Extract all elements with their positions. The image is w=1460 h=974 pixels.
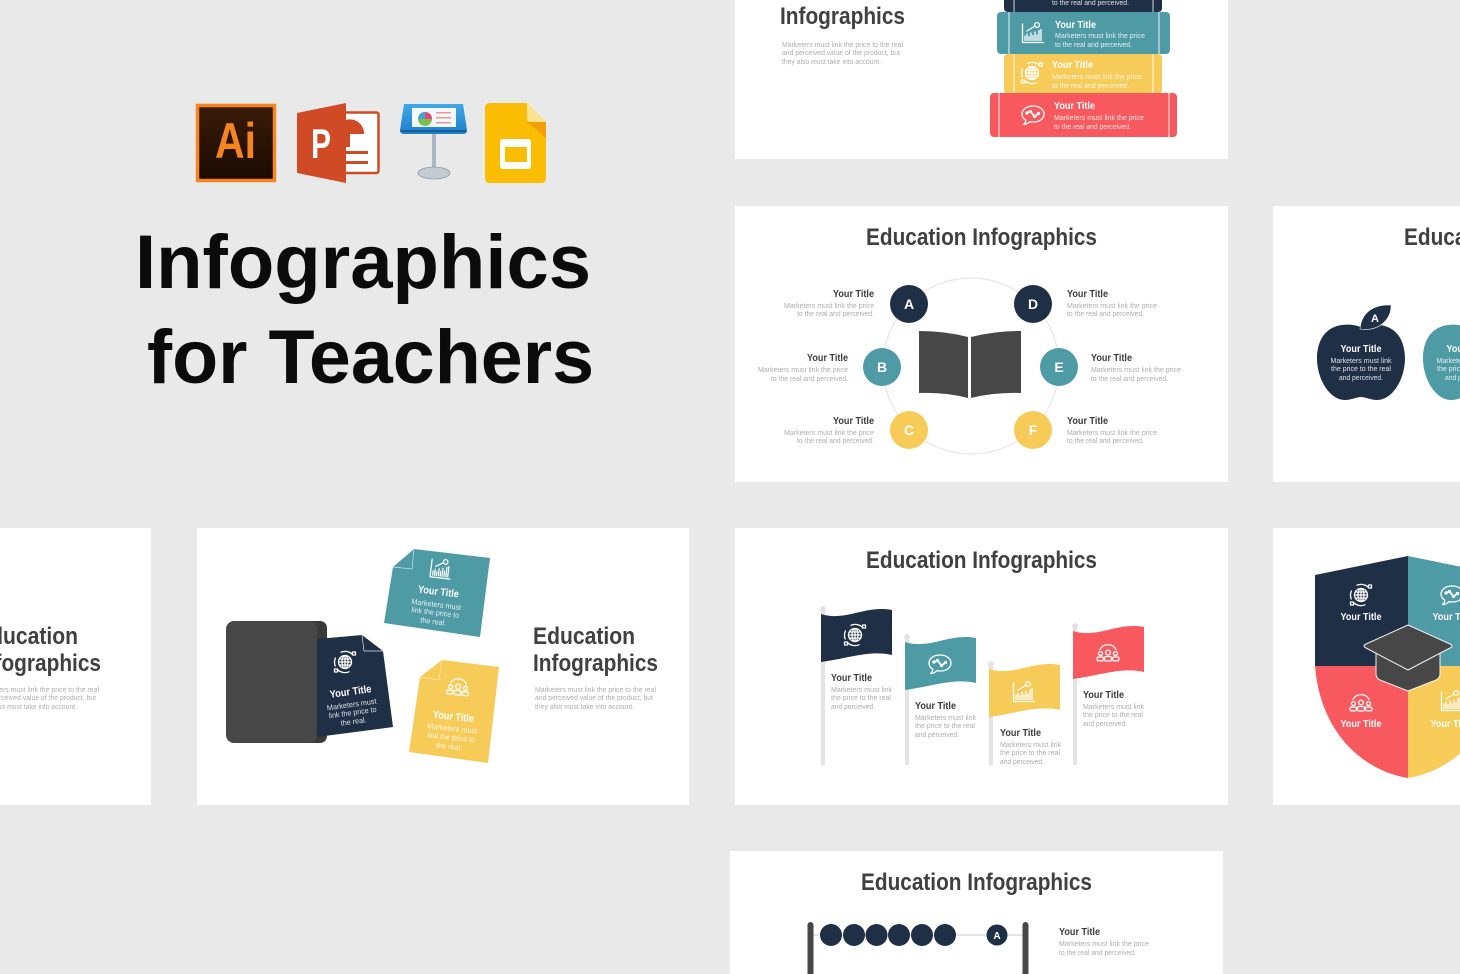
text block (1059, 926, 1149, 957)
item B (758, 348, 901, 386)
note: teal: the real. (420, 615, 447, 628)
shield quadrant: yellow (1408, 666, 1460, 778)
flag 3: and perceived. (1000, 757, 1044, 766)
main title: for Teachers (147, 315, 594, 400)
book: red: Marketers must link the price (1054, 113, 1144, 122)
text block (535, 685, 656, 711)
flag 1: Marketers must link (831, 685, 892, 694)
panel: shield slide (1273, 528, 1460, 805)
book: yellow: Your Title (1052, 59, 1093, 71)
flag 4: Marketers must link (1083, 702, 1144, 711)
item B: to the real and perceived. (771, 374, 848, 383)
item A: Your Title (833, 288, 874, 300)
main title (135, 220, 594, 400)
icon: Google Slides (485, 103, 546, 183)
flag 1 (820, 606, 892, 765)
note: yellow (409, 660, 499, 763)
note: navy: Marketers must (326, 696, 378, 712)
text block: to the real and perceived. (1059, 948, 1136, 957)
item E: to the real and perceived. (1091, 374, 1168, 383)
book: navy (1004, 0, 1162, 12)
note: yellow: link the price to (427, 731, 476, 744)
note: yellow: Your Title (432, 709, 474, 725)
abacus: A (993, 931, 1001, 942)
note: navy: Your Title (329, 683, 372, 701)
apple: navy: Marketers must link (1330, 356, 1392, 365)
text block: Marketers must link the price (1059, 939, 1149, 948)
icon: graduation cap (1364, 625, 1452, 691)
item D: to the real and perceived. (1067, 309, 1144, 318)
item B: B (877, 359, 887, 375)
flag 2 (904, 634, 976, 765)
panel: cropped left slide (0, 528, 151, 805)
heading: Education (533, 623, 635, 650)
book: teal: Your Title (1055, 19, 1096, 31)
heading: Education Infographics (866, 224, 1097, 251)
item C: to the real and perceived. (797, 436, 874, 445)
item C (784, 411, 928, 449)
flag 1: the price to the real (831, 693, 891, 702)
flag 3 (988, 661, 1061, 766)
item D: Marketers must link the price (1067, 301, 1157, 310)
flag 3: Your Title (1000, 727, 1041, 739)
flag 2: the price to the real (915, 721, 975, 730)
text block: Your Title (1059, 926, 1100, 938)
text block: Marketers must link the price to the real (782, 40, 903, 49)
item E: Marketers must link the price (1091, 365, 1181, 374)
item F: Marketers must link the price (1067, 428, 1157, 437)
apple: navy: the price to the real (1331, 364, 1391, 373)
heading: Infographics (780, 3, 905, 30)
note: teal: Your Title (417, 584, 460, 600)
book: yellow (1004, 54, 1162, 94)
item E: E (1054, 359, 1064, 375)
flag 1: and perceived. (831, 702, 875, 711)
heading: Infographics (533, 650, 658, 677)
item C: C (904, 422, 914, 438)
item E: Your Title (1091, 352, 1132, 364)
item F (1014, 411, 1157, 449)
note: navy: link the price to (328, 705, 377, 720)
shield quadrant: red: Your Title (1340, 718, 1382, 730)
main title: Infographics (135, 220, 591, 305)
note: yellow: the real. (436, 741, 463, 752)
tablet (226, 621, 327, 743)
panel: book circle slide (735, 206, 1228, 482)
shield quadrant: navy (1315, 556, 1408, 666)
apple: navy: and perceived. (1339, 373, 1383, 382)
text block: they also must take into account. (782, 57, 881, 66)
icon: open book (919, 331, 1021, 398)
icon: Keynote (400, 104, 467, 179)
heading (533, 623, 658, 677)
shield quadrant: teal (1408, 556, 1460, 666)
apple: teal (1423, 325, 1460, 400)
item F: to the real and perceived. (1067, 436, 1144, 445)
note: teal: Marketers must (411, 597, 463, 612)
note: teal: link the price to (411, 605, 460, 620)
item F: Your Title (1067, 415, 1108, 427)
shield quadrant: navy: Your Title (1340, 611, 1382, 623)
note: teal (384, 549, 490, 637)
shield quadrant: red (1315, 666, 1408, 778)
book: yellow: to the real and perceived. (1052, 81, 1129, 90)
item A: Marketers must link the price (784, 301, 874, 310)
text block: Marketers must link the price to the real (535, 685, 656, 694)
text block: and perceived value of the product, but (535, 693, 654, 702)
flag 2: and perceived. (915, 730, 959, 739)
apple: navy: Your Title (1340, 343, 1382, 355)
flag 1: Your Title (831, 672, 872, 684)
panel: tablet and notes slide (197, 528, 689, 805)
flag 3: the price to the real (1000, 748, 1060, 757)
book: teal: Marketers must link the price (1055, 31, 1145, 40)
flag 4: Your Title (1083, 689, 1124, 701)
apple: navy: A (1371, 313, 1379, 325)
heading: Education Infographics (866, 547, 1097, 574)
item A (784, 285, 928, 323)
flag 4 (1072, 623, 1144, 765)
item B: Marketers must link the price (758, 365, 848, 374)
abacus (808, 922, 1028, 974)
icon: Adobe Illustrator (198, 106, 274, 180)
panel: abacus slide (730, 851, 1223, 974)
flag 3: Marketers must link (1000, 740, 1061, 749)
item C: Your Title (833, 415, 874, 427)
book: red: to the real and perceived. (1054, 122, 1131, 131)
note: navy (317, 635, 393, 737)
text block (0, 685, 99, 711)
item D: D (1028, 296, 1038, 312)
software icons row (198, 103, 546, 183)
text block (782, 40, 903, 66)
icon: Adobe Illustrator: Ai (215, 113, 256, 169)
panel: apple slide (1273, 206, 1460, 482)
note: yellow: Marketers must (427, 721, 478, 736)
text block: and perceived value of the product, but (782, 48, 901, 57)
item B: Your Title (807, 352, 848, 364)
item C: Marketers must link the price (784, 428, 874, 437)
item D: Your Title (1067, 288, 1108, 300)
item E (1040, 348, 1181, 386)
icon: PowerPoint (297, 103, 378, 183)
icon: PowerPoint: P (311, 120, 331, 167)
heading: Education Infographics (861, 869, 1092, 896)
flag 4: and perceived. (1083, 719, 1127, 728)
panel: flags slide (735, 528, 1228, 805)
item A: to the real and perceived. (797, 309, 874, 318)
book: teal: to the real and perceived. (1055, 40, 1132, 49)
heading (0, 623, 101, 677)
item A: A (904, 296, 914, 312)
book: teal (997, 12, 1170, 54)
item D (1014, 285, 1157, 323)
flag 2: Your Title (915, 700, 956, 712)
book: red (990, 93, 1177, 137)
apple: navy (1317, 305, 1405, 400)
item F: F (1029, 422, 1038, 438)
flag 2: Marketers must link (915, 713, 976, 722)
flag 4: the price to the real (1083, 710, 1143, 719)
book: yellow: Marketers must link the price (1052, 72, 1142, 81)
book: red: Your Title (1054, 100, 1095, 112)
text block: they also must take into account. (535, 702, 634, 711)
panel: stacked books slide (735, 0, 1228, 159)
note: navy: the real. (340, 715, 367, 728)
